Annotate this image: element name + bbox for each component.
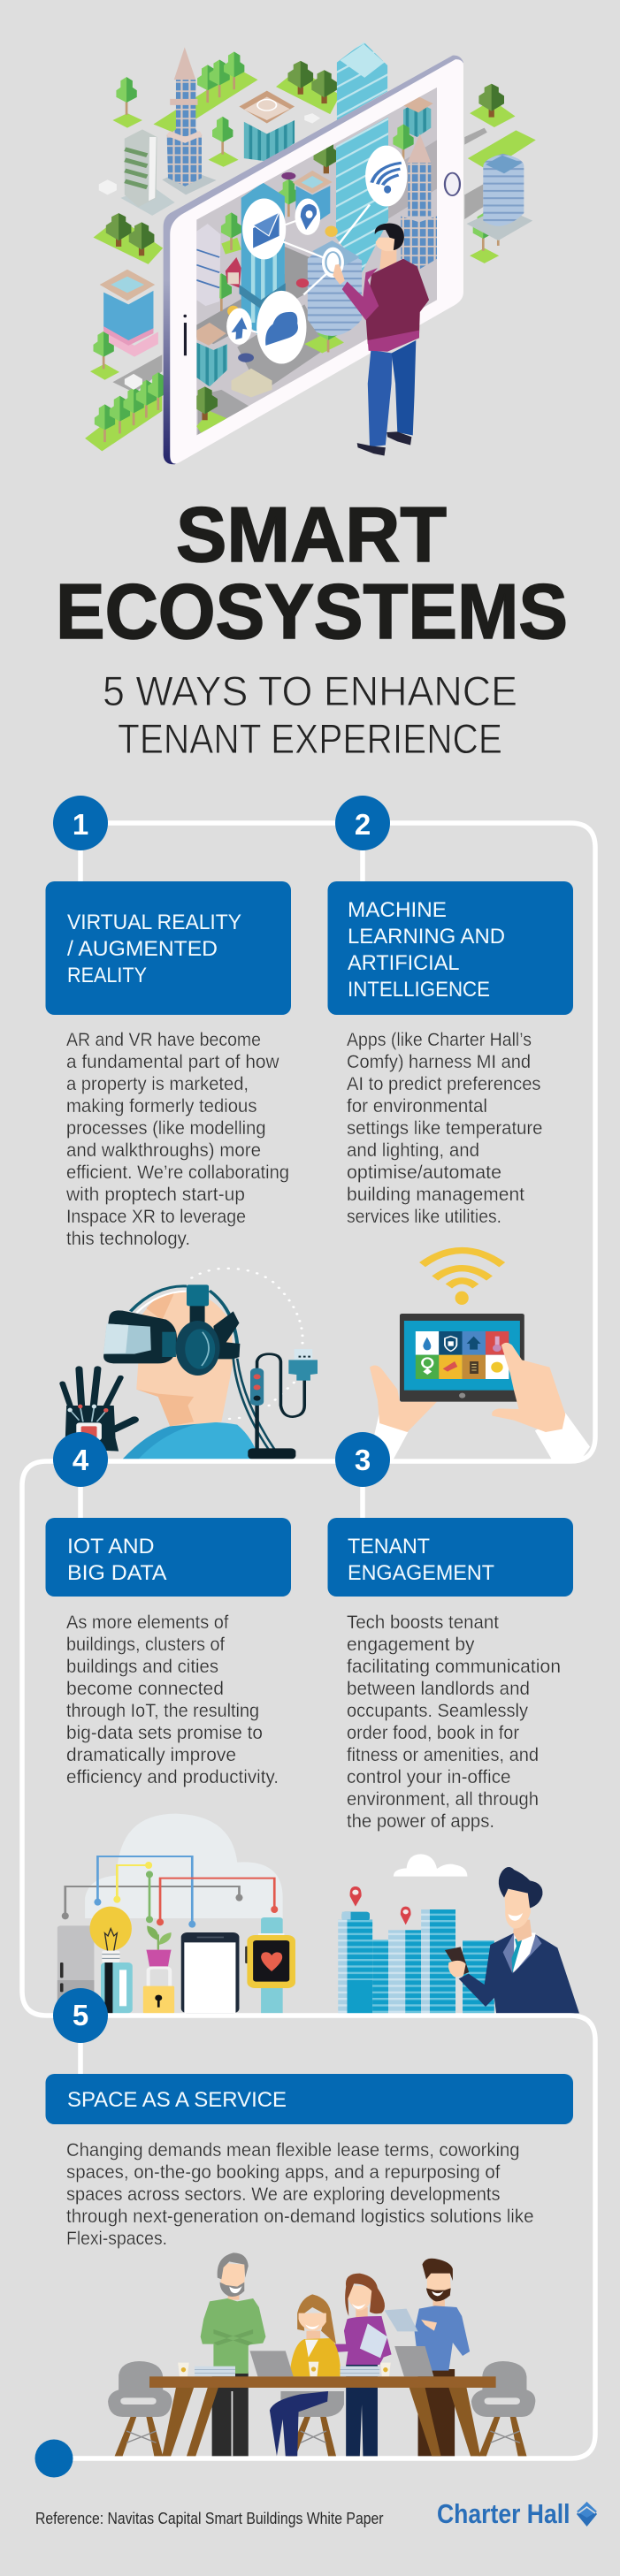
heading panel 1: REALITY <box>67 964 147 987</box>
body text 2: Apps (like Charter Hall’s <box>347 1030 532 1050</box>
heading panel 3: TENANT <box>348 1535 430 1559</box>
body text 2 <box>347 1030 543 1227</box>
heading panel 3 <box>327 1518 573 1597</box>
body text 2: building management <box>347 1185 524 1205</box>
hero illustration: smart city on tablet <box>85 42 536 464</box>
fridge <box>57 1925 94 2013</box>
body text 3: Tech boosts tenant <box>347 1612 499 1633</box>
illustration: virtual reality headset user <box>63 1269 318 1459</box>
dotted cable arc <box>186 1269 302 1419</box>
heading panel 4 <box>46 1518 291 1597</box>
body text 3: environment, all through <box>347 1789 539 1810</box>
number badge 4 <box>53 1432 108 1487</box>
location pins <box>350 1886 411 1924</box>
person pointing at tablet <box>333 223 429 456</box>
connector path linking the five steps <box>22 823 595 2458</box>
body text 4: efficiency and productivity. <box>66 1767 279 1787</box>
heading panel 1: VIRTUAL REALITY <box>67 911 241 934</box>
body text 2: for environmental <box>347 1096 487 1117</box>
body text 1 <box>65 1030 289 1249</box>
heading panel 2: ARTIFICIAL <box>348 951 460 975</box>
body text 4: As more elements of <box>66 1612 229 1633</box>
illustration: businessman with phone and city skyline <box>338 1854 579 2013</box>
body text 5: Changing demands mean flexible lease terms, coworking <box>66 2140 520 2161</box>
subtitle <box>103 667 517 762</box>
chairs <box>108 2361 535 2456</box>
body text 5: through next-generation on-demand logistics solutions like <box>66 2206 534 2227</box>
small red house <box>226 257 241 287</box>
round building <box>467 207 532 240</box>
body text 1: making formerly tedious <box>66 1096 256 1117</box>
illustration: hands holding smart-building tablet <box>364 1251 590 1459</box>
heading panel 2: INTELLIGENCE <box>348 978 490 1002</box>
illustration: internet of things devices <box>57 1814 295 2013</box>
body text 4 <box>66 1612 279 1787</box>
smart lock <box>143 1968 174 2013</box>
tower right in screen <box>407 134 431 163</box>
smartphone <box>181 1932 239 2013</box>
table <box>149 2376 496 2456</box>
connecting wires <box>62 1856 278 1928</box>
body text 1: a fundamental part of how <box>66 1052 279 1072</box>
left teal tower <box>241 183 285 341</box>
body text 1: this technology. <box>66 1229 190 1249</box>
body text 3: facilitating communication <box>347 1657 561 1677</box>
body text 4: become connected <box>66 1679 224 1699</box>
small cloud <box>394 1854 467 1877</box>
body text 2: and lighting, and <box>347 1140 479 1161</box>
balcony building <box>120 187 175 216</box>
man in blue <box>415 2259 470 2456</box>
heading panel 3: ENGAGEMENT <box>348 1561 494 1585</box>
body text 3: between landlords and <box>347 1679 530 1699</box>
shoulder <box>123 1422 259 1459</box>
heading panel 5 <box>46 2074 573 2124</box>
smart watch <box>245 1917 295 2013</box>
balcony block in screen <box>196 224 220 306</box>
seated woman in yellow <box>270 2294 341 2456</box>
illustration: team around a table <box>108 2252 535 2456</box>
body text 4: dramatically improve <box>66 1745 236 1765</box>
heli small <box>196 342 227 386</box>
head and neck <box>136 1292 233 1426</box>
helipad building <box>244 120 295 162</box>
heading panel 1: / AUGMENTED <box>67 937 218 961</box>
small house <box>232 369 272 397</box>
woman in purple <box>322 2274 418 2456</box>
step 4: IoT and big data <box>46 1432 291 1787</box>
shirt cuffs <box>364 1412 408 1459</box>
heading panel 5: SPACE AS A SERVICE <box>67 2088 287 2112</box>
tablet screen: map <box>190 85 439 438</box>
body text 2: AI to predict preferences <box>347 1074 541 1094</box>
cables and controller <box>233 1349 318 1459</box>
icon bubbles <box>226 146 407 364</box>
number badge 1: 1 <box>73 808 88 841</box>
pool building <box>109 332 158 357</box>
round tower <box>308 247 362 336</box>
body text 3: the power of apps. <box>347 1811 494 1832</box>
body text 5: spaces across sectors. We are exploring developments <box>66 2184 501 2205</box>
body text 1: a property is marketed, <box>66 1074 249 1094</box>
step 5: space as a service <box>46 1988 573 2249</box>
body text 2: services like utilities. <box>347 1207 501 1227</box>
body text 2: Comfy) harness MI and <box>347 1052 531 1072</box>
body text 5: spaces, on-the-go booking apps, and a repurposing of <box>66 2162 501 2183</box>
heading panel 2: LEARNING AND <box>348 925 505 949</box>
man in green <box>201 2252 265 2456</box>
body text 3: engagement by <box>347 1635 475 1655</box>
cloud <box>85 1814 283 1918</box>
gloved hand with circuits <box>63 1368 134 1452</box>
body text 4: buildings and cities <box>66 1657 218 1677</box>
Charter Hall logo: Charter Hall <box>437 2498 570 2529</box>
reference note: Reference: Navitas Capital Smart Buildings White Paper <box>35 2510 384 2527</box>
title <box>56 491 568 655</box>
body text 1: efficient. We’re collaborating <box>66 1162 289 1183</box>
body text 4: big-data sets promise to <box>66 1723 263 1743</box>
step 2: machine learning <box>327 796 573 1227</box>
heading panel 4: BIG DATA <box>67 1561 167 1585</box>
body text 3: control your in-office <box>347 1767 511 1787</box>
number badge 2: 2 <box>355 808 371 841</box>
right hand pointing <box>492 1343 565 1432</box>
number badge 3 <box>335 1432 390 1487</box>
body text 3: occupants. Seamlessly <box>347 1701 528 1721</box>
step 3: tenant engagement <box>327 1432 573 1832</box>
tablet frame <box>164 56 463 464</box>
step 1: virtual reality <box>46 796 291 1249</box>
body text 4: buildings, clusters of <box>66 1635 225 1655</box>
body text 3 <box>347 1612 561 1832</box>
number badge 5: 5 <box>73 1999 88 2031</box>
cars <box>281 172 295 179</box>
headset <box>103 1284 240 1376</box>
tall tower top <box>337 42 387 120</box>
wifi symbol <box>422 1251 502 1305</box>
plant pot <box>146 1925 172 1966</box>
tall blue tower <box>336 118 388 272</box>
connecting lines <box>250 204 370 332</box>
body text 1: and walkthroughs) more <box>66 1140 261 1161</box>
body text 5 <box>66 2140 534 2249</box>
body text 1: processes (like modelling <box>66 1118 265 1139</box>
businessman <box>445 1867 579 2013</box>
body text 3: fitness or amenities, and <box>347 1745 539 1765</box>
number badge 5 <box>53 1988 108 2043</box>
number badge 4: 4 <box>73 1444 89 1476</box>
body text 3: order food, book in for <box>347 1723 519 1743</box>
body text 4: through IoT, the resulting <box>66 1701 259 1721</box>
title: ECOSYSTEMS <box>56 568 568 655</box>
number badge 2 <box>335 796 390 850</box>
smart band <box>101 1962 133 2013</box>
tablet device <box>400 1314 524 1402</box>
body text 5: Flexi-spaces. <box>66 2229 167 2249</box>
left hand <box>370 1366 437 1432</box>
number badge 1 <box>53 796 108 850</box>
heading panel 1 <box>46 881 291 1015</box>
heading panel 2 <box>327 881 573 1015</box>
city behind the tablet <box>85 42 536 451</box>
body text 1: with proptech start-up <box>65 1185 245 1205</box>
spire tower <box>162 169 217 194</box>
skyline <box>338 1909 494 2013</box>
subtitle: 5 WAYS TO ENHANCE <box>103 667 517 714</box>
body text 2: settings like temperature <box>347 1118 543 1139</box>
body text 1: AR and VR have become <box>66 1030 261 1050</box>
pool building in screen <box>295 186 331 220</box>
white boxes <box>99 179 117 194</box>
heading panel 2: MACHINE <box>348 898 447 922</box>
body text 1: Inspace XR to leverage <box>66 1207 246 1227</box>
number badge 3: 3 <box>355 1444 371 1476</box>
subtitle: TENANT EXPERIENCE <box>118 715 502 762</box>
end-of-path blue dot <box>35 2440 73 2477</box>
heading panel 4: IOT AND <box>67 1535 154 1559</box>
body text 2: optimise/automate <box>347 1162 501 1183</box>
title: SMART <box>176 491 447 578</box>
light bulb <box>89 1907 132 1962</box>
laptops, cups and books <box>178 2346 433 2376</box>
